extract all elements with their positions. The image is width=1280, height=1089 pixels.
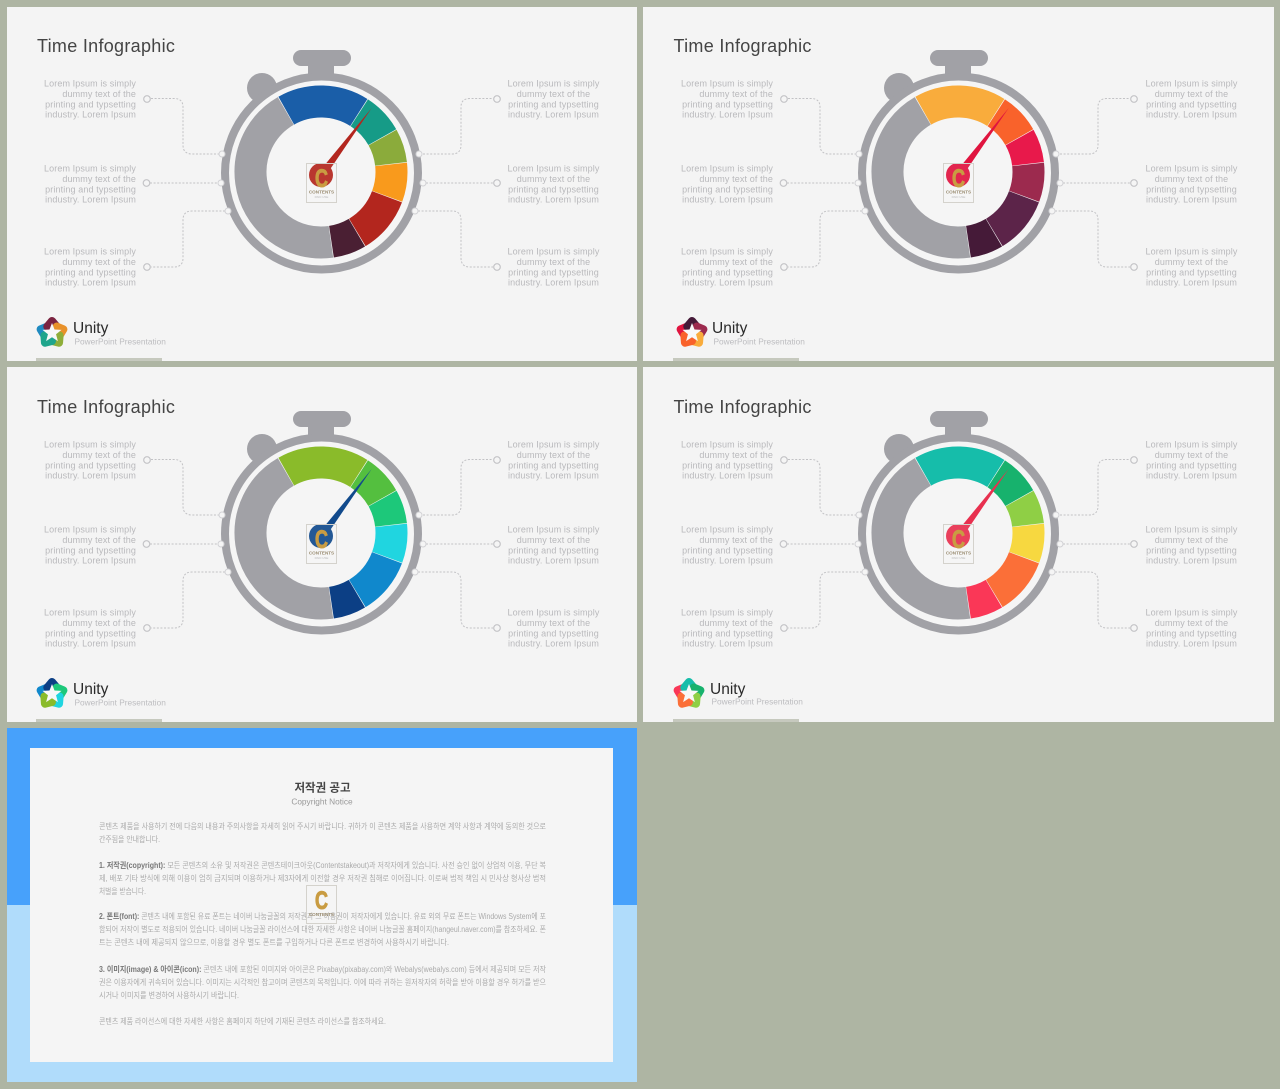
left text blocks: dummy text of the	[62, 174, 136, 184]
right text blocks: dummy text of the	[1155, 450, 1228, 460]
left text blocks: Lorem Ipsum is simply	[44, 524, 136, 534]
right text blocks: dummy text of the	[517, 618, 590, 628]
right text blocks: dummy text of the	[1155, 257, 1228, 267]
watermark logo: PAID USE	[315, 556, 328, 560]
icon: star logo	[681, 321, 703, 343]
right text blocks	[1145, 439, 1238, 648]
left text blocks: printing and typsetting	[682, 184, 773, 194]
panel: green stopwatch	[7, 367, 637, 722]
watermark logo: C	[952, 526, 965, 554]
watermark logo	[944, 524, 974, 564]
left text blocks: printing and typsetting	[45, 628, 136, 638]
left text blocks: printing and typsetting	[682, 545, 773, 555]
right text blocks: Lorem Ipsum is simply	[507, 439, 600, 449]
left text blocks: dummy text of the	[699, 257, 773, 267]
left text blocks: industry. Lorem Ipsum	[45, 555, 136, 565]
watermark logo	[306, 524, 336, 564]
right text blocks: dummy text of the	[517, 257, 590, 267]
left text blocks	[44, 78, 136, 287]
section: image and icon: 권은 이용자에게 귀속되어 있습니다. 이미지는 시각적인 참고이며 콘텐츠의 목적입니다. 이에 따라 귀하는 원저작자의 허락을 받아 이용할 경우 허가를 받으	[99, 977, 546, 987]
section: font: 함되어 저작이 별도로 적용되어 있습니다. 네이버 나눔글꼴 라이선스에 대한 자세한 사항은 네이버 나눔글꼴 홈페이지(hangeul.naver.com)를 참조하세요. 폰	[99, 924, 546, 934]
left text blocks: industry. Lorem Ipsum	[45, 109, 136, 119]
left text blocks: printing and typsetting	[682, 628, 773, 638]
donut gauge	[861, 75, 1055, 269]
left text blocks: dummy text of the	[62, 618, 136, 628]
needle	[309, 469, 372, 548]
right text blocks: Lorem Ipsum is simply	[507, 78, 600, 88]
left text blocks: printing and typsetting	[45, 545, 136, 555]
donut gauge	[861, 436, 1055, 630]
needle	[946, 469, 1009, 548]
right text blocks: dummy text of the	[1155, 89, 1228, 99]
left text blocks: Lorem Ipsum is simply	[681, 163, 773, 173]
left text blocks	[44, 439, 136, 648]
heading: Copyright Notice	[291, 796, 353, 806]
brand text: PowerPoint Presentation	[714, 336, 805, 346]
title: Time Infographic	[674, 397, 812, 417]
right text blocks: Lorem Ipsum is simply	[1145, 246, 1238, 256]
brand text	[73, 681, 166, 708]
right text blocks: industry. Lorem Ipsum	[508, 194, 599, 204]
right text blocks: printing and typsetting	[1146, 460, 1237, 470]
left text blocks: printing and typsetting	[682, 460, 773, 470]
watermark logo: CONTENTS	[309, 190, 334, 194]
brand text: Unity	[73, 681, 109, 698]
right text blocks	[1145, 78, 1238, 287]
watermark logo: CONTENTS	[946, 550, 971, 556]
right text blocks	[507, 439, 600, 648]
right text blocks: industry. Lorem Ipsum	[1146, 555, 1237, 565]
connectors	[143, 457, 500, 631]
right text blocks: industry. Lorem Ipsum	[1146, 194, 1237, 204]
left text blocks	[681, 439, 773, 648]
right text blocks: Lorem Ipsum is simply	[507, 246, 600, 256]
left text blocks: Lorem Ipsum is simply	[681, 524, 773, 534]
watermark logo: C	[315, 165, 328, 193]
watermark logo: C	[952, 165, 965, 193]
watermark logo	[306, 164, 336, 202]
section: font: 트는 콘텐츠 내에 제공되지 않으므로, 이용할 경우 별도 폰트를 구입하거나 다른 폰트로 변경하여 사용하시기 바랍니다.	[99, 937, 449, 947]
connectors	[143, 96, 500, 270]
icon: star logo	[678, 682, 700, 704]
panel: blue stopwatch	[7, 7, 637, 361]
watermark logo	[306, 886, 336, 924]
brand text	[73, 320, 166, 346]
right text blocks: Lorem Ipsum is simply	[1145, 78, 1238, 88]
watermark logo: PAID USE	[952, 195, 965, 199]
right text blocks: Lorem Ipsum is simply	[507, 607, 600, 617]
left text blocks: Lorem Ipsum is simply	[44, 439, 136, 449]
right text blocks: printing and typsetting	[1146, 267, 1237, 277]
panel: copyright notice	[7, 728, 637, 1082]
left text blocks: dummy text of the	[699, 450, 773, 460]
left text blocks: industry. Lorem Ipsum	[45, 194, 136, 204]
left text blocks: industry. Lorem Ipsum	[682, 638, 773, 648]
section: image and icon: 시거나 이미지를 변경하여 사용하시기 바랍니다.	[99, 990, 239, 1000]
stopwatch body	[225, 50, 418, 270]
left text blocks: Lorem Ipsum is simply	[44, 78, 136, 88]
right text blocks: printing and typsetting	[508, 460, 599, 470]
footer note: 콘텐츠 제품 라이선스에 대한 자세한 사항은 홈페이지 하단에 기재된 콘텐츠 라이선스를 참조하세요.	[99, 1016, 386, 1026]
brand text: PowerPoint Presentation	[712, 696, 803, 706]
panel: orange stopwatch	[643, 7, 1274, 361]
left text blocks: Lorem Ipsum is simply	[44, 246, 136, 256]
icon: star logo	[41, 682, 63, 704]
section: copyright: 처벌을 받습니다.	[99, 886, 146, 896]
left text blocks: Lorem Ipsum is simply	[44, 163, 136, 173]
right text blocks: industry. Lorem Ipsum	[1146, 109, 1237, 119]
right text blocks: dummy text of the	[1155, 174, 1228, 184]
section: copyright	[99, 860, 546, 896]
right text blocks: printing and typsetting	[508, 267, 599, 277]
left text blocks: dummy text of the	[699, 535, 773, 545]
section: image and icon	[99, 964, 547, 1000]
left text blocks: industry. Lorem Ipsum	[682, 470, 773, 480]
brand text: Unity	[73, 320, 109, 337]
section: image and icon: 3. 이미지(image) & 아이콘(icon): 콘텐츠 내에 포함된 이미지와 아이콘은 Pixabay(pixabay.com)와 Webalys(webalys.com) 등에서 제공되며 모든 저작	[99, 964, 547, 974]
left text blocks: printing and typsetting	[682, 267, 773, 277]
right text blocks: dummy text of the	[517, 450, 590, 460]
left text blocks: industry. Lorem Ipsum	[682, 109, 773, 119]
brand text: Unity	[710, 681, 746, 698]
left text blocks: dummy text of the	[62, 89, 136, 99]
right text blocks: Lorem Ipsum is simply	[1145, 607, 1238, 617]
stopwatch body	[862, 50, 1055, 270]
watermark logo: C	[315, 526, 328, 554]
needle	[309, 108, 372, 187]
brand text: PowerPoint Presentation	[74, 336, 166, 346]
right text blocks: dummy text of the	[1155, 535, 1228, 545]
right text blocks: Lorem Ipsum is simply	[507, 524, 600, 534]
left text blocks: Lorem Ipsum is simply	[681, 439, 773, 449]
right text blocks: industry. Lorem Ipsum	[508, 555, 599, 565]
icon: star logo	[41, 321, 63, 343]
brand text: PowerPoint Presentation	[74, 698, 166, 708]
title: Time Infographic	[37, 397, 175, 417]
watermark logo	[944, 164, 974, 202]
right text blocks: printing and typsetting	[1146, 184, 1237, 194]
left text blocks: dummy text of the	[62, 257, 136, 267]
title: Time Infographic	[674, 36, 812, 56]
brand text: Unity	[712, 320, 748, 337]
left text blocks: industry. Lorem Ipsum	[45, 277, 136, 287]
connectors	[780, 96, 1137, 270]
section: font: 2. 폰트(font): 콘텐츠 내에 포함된 유료 폰트는 네이버 나눔글꼴의 저작권과 그 이용권이 저작자에게 있습니다. 유료 외의 무료 폰트는 Windows System에 포	[99, 911, 546, 921]
watermark logo: CONTENTS	[946, 190, 971, 194]
left text blocks: dummy text of the	[62, 535, 136, 545]
section: copyright: 제, 배포 기타 방식에 의해 이용이 엄히 금지되며 이용하거나 제3자에게 이전할 경우 저작권 침해로 이어집니다. 이로써 법적 책임 시 민사상 형사상 법적	[99, 873, 546, 883]
right text blocks: Lorem Ipsum is simply	[1145, 439, 1238, 449]
title: Time Infographic	[37, 36, 175, 56]
left text blocks: industry. Lorem Ipsum	[682, 555, 773, 565]
right text blocks: dummy text of the	[1155, 618, 1228, 628]
left text blocks: industry. Lorem Ipsum	[682, 277, 773, 287]
brand text	[712, 320, 805, 346]
right text blocks: dummy text of the	[517, 174, 590, 184]
heading	[291, 780, 353, 806]
right text blocks: Lorem Ipsum is simply	[507, 163, 600, 173]
left text blocks: Lorem Ipsum is simply	[681, 246, 773, 256]
right text blocks: printing and typsetting	[1146, 628, 1237, 638]
section: font	[99, 911, 546, 947]
right text blocks	[507, 78, 600, 287]
intro text: 간주됨을 안내합니다.	[99, 834, 160, 844]
right text blocks: printing and typsetting	[508, 628, 599, 638]
left text blocks: Lorem Ipsum is simply	[681, 607, 773, 617]
donut gauge	[224, 75, 418, 269]
intro text: 콘텐츠 제품을 사용하기 전에 다음의 내용과 주의사항을 자세히 읽어 주시기 바랍니다. 귀하가 이 콘텐츠 제품을 사용하면 계약 사항과 계약에 동의한 것으로	[99, 821, 546, 831]
watermark logo: CONTENTS	[309, 550, 334, 556]
watermark logo: CONTENTS	[309, 912, 334, 917]
left text blocks: dummy text of the	[699, 618, 773, 628]
brand text	[710, 681, 803, 706]
right text blocks: Lorem Ipsum is simply	[1145, 163, 1238, 173]
watermark logo: C	[315, 887, 328, 915]
right text blocks: printing and typsetting	[508, 184, 599, 194]
stopwatch body	[225, 411, 418, 630]
left text blocks: printing and typsetting	[45, 99, 136, 109]
left text blocks: industry. Lorem Ipsum	[45, 470, 136, 480]
section: copyright: 1. 저작권(copyright): 모든 콘텐츠의 소유 및 저작권은 콘텐츠테이크아웃(Contentstakeout)과 저작자에게 있습니다. 사전 승인 없이 상업적 이용, 무단 복	[99, 860, 546, 870]
left text blocks: dummy text of the	[62, 450, 136, 460]
right text blocks: Lorem Ipsum is simply	[1145, 524, 1238, 534]
left text blocks: industry. Lorem Ipsum	[682, 194, 773, 204]
right text blocks: industry. Lorem Ipsum	[1146, 638, 1237, 648]
left text blocks: dummy text of the	[699, 174, 773, 184]
watermark logo: PAID USE	[952, 556, 965, 560]
right text blocks: printing and typsetting	[1146, 99, 1237, 109]
left text blocks: printing and typsetting	[45, 267, 136, 277]
left text blocks: printing and typsetting	[682, 99, 773, 109]
right text blocks: printing and typsetting	[508, 99, 599, 109]
heading: 저작권 공고	[294, 780, 351, 794]
left text blocks: printing and typsetting	[45, 184, 136, 194]
needle	[946, 108, 1009, 187]
right text blocks: industry. Lorem Ipsum	[508, 470, 599, 480]
right text blocks: industry. Lorem Ipsum	[1146, 470, 1237, 480]
intro text	[99, 821, 546, 844]
stopwatch body	[862, 411, 1055, 630]
donut gauge	[224, 436, 418, 630]
right text blocks: printing and typsetting	[1146, 545, 1237, 555]
left text blocks: Lorem Ipsum is simply	[681, 78, 773, 88]
right text blocks: dummy text of the	[517, 89, 590, 99]
left text blocks: industry. Lorem Ipsum	[45, 638, 136, 648]
watermark logo: PAID USE	[315, 195, 328, 199]
right text blocks: industry. Lorem Ipsum	[508, 109, 599, 119]
connectors	[780, 457, 1137, 631]
right text blocks: industry. Lorem Ipsum	[508, 277, 599, 287]
left text blocks: printing and typsetting	[45, 460, 136, 470]
right text blocks: printing and typsetting	[508, 545, 599, 555]
left text blocks: Lorem Ipsum is simply	[44, 607, 136, 617]
right text blocks: industry. Lorem Ipsum	[508, 638, 599, 648]
left text blocks: dummy text of the	[699, 89, 773, 99]
right text blocks: dummy text of the	[517, 535, 590, 545]
panel: teal stopwatch	[643, 367, 1274, 722]
right text blocks: industry. Lorem Ipsum	[1146, 277, 1237, 287]
left text blocks	[681, 78, 773, 287]
